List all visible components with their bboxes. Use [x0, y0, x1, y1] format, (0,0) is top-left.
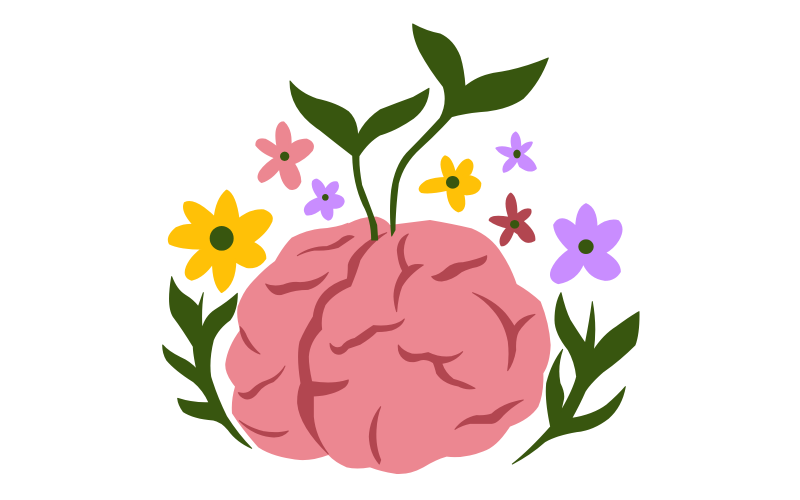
central fissure [298, 233, 387, 454]
small lilac flower [497, 133, 536, 172]
sprouts growing from the brain [290, 24, 548, 240]
left leafy plant [163, 277, 252, 448]
small purple flower [305, 180, 343, 219]
brain silhouette [225, 217, 551, 474]
small yellow flower [420, 157, 480, 211]
large yellow flower [169, 191, 271, 292]
red flower [490, 194, 534, 245]
pink flower [257, 123, 313, 189]
brain [225, 217, 551, 474]
right leafy plant [512, 293, 639, 464]
large lilac flower [551, 204, 622, 283]
right flowers and plant [490, 133, 639, 464]
left flowers and plant [163, 123, 343, 448]
right sprout [390, 24, 548, 236]
left sprout [290, 81, 429, 240]
brain folds [238, 233, 535, 464]
